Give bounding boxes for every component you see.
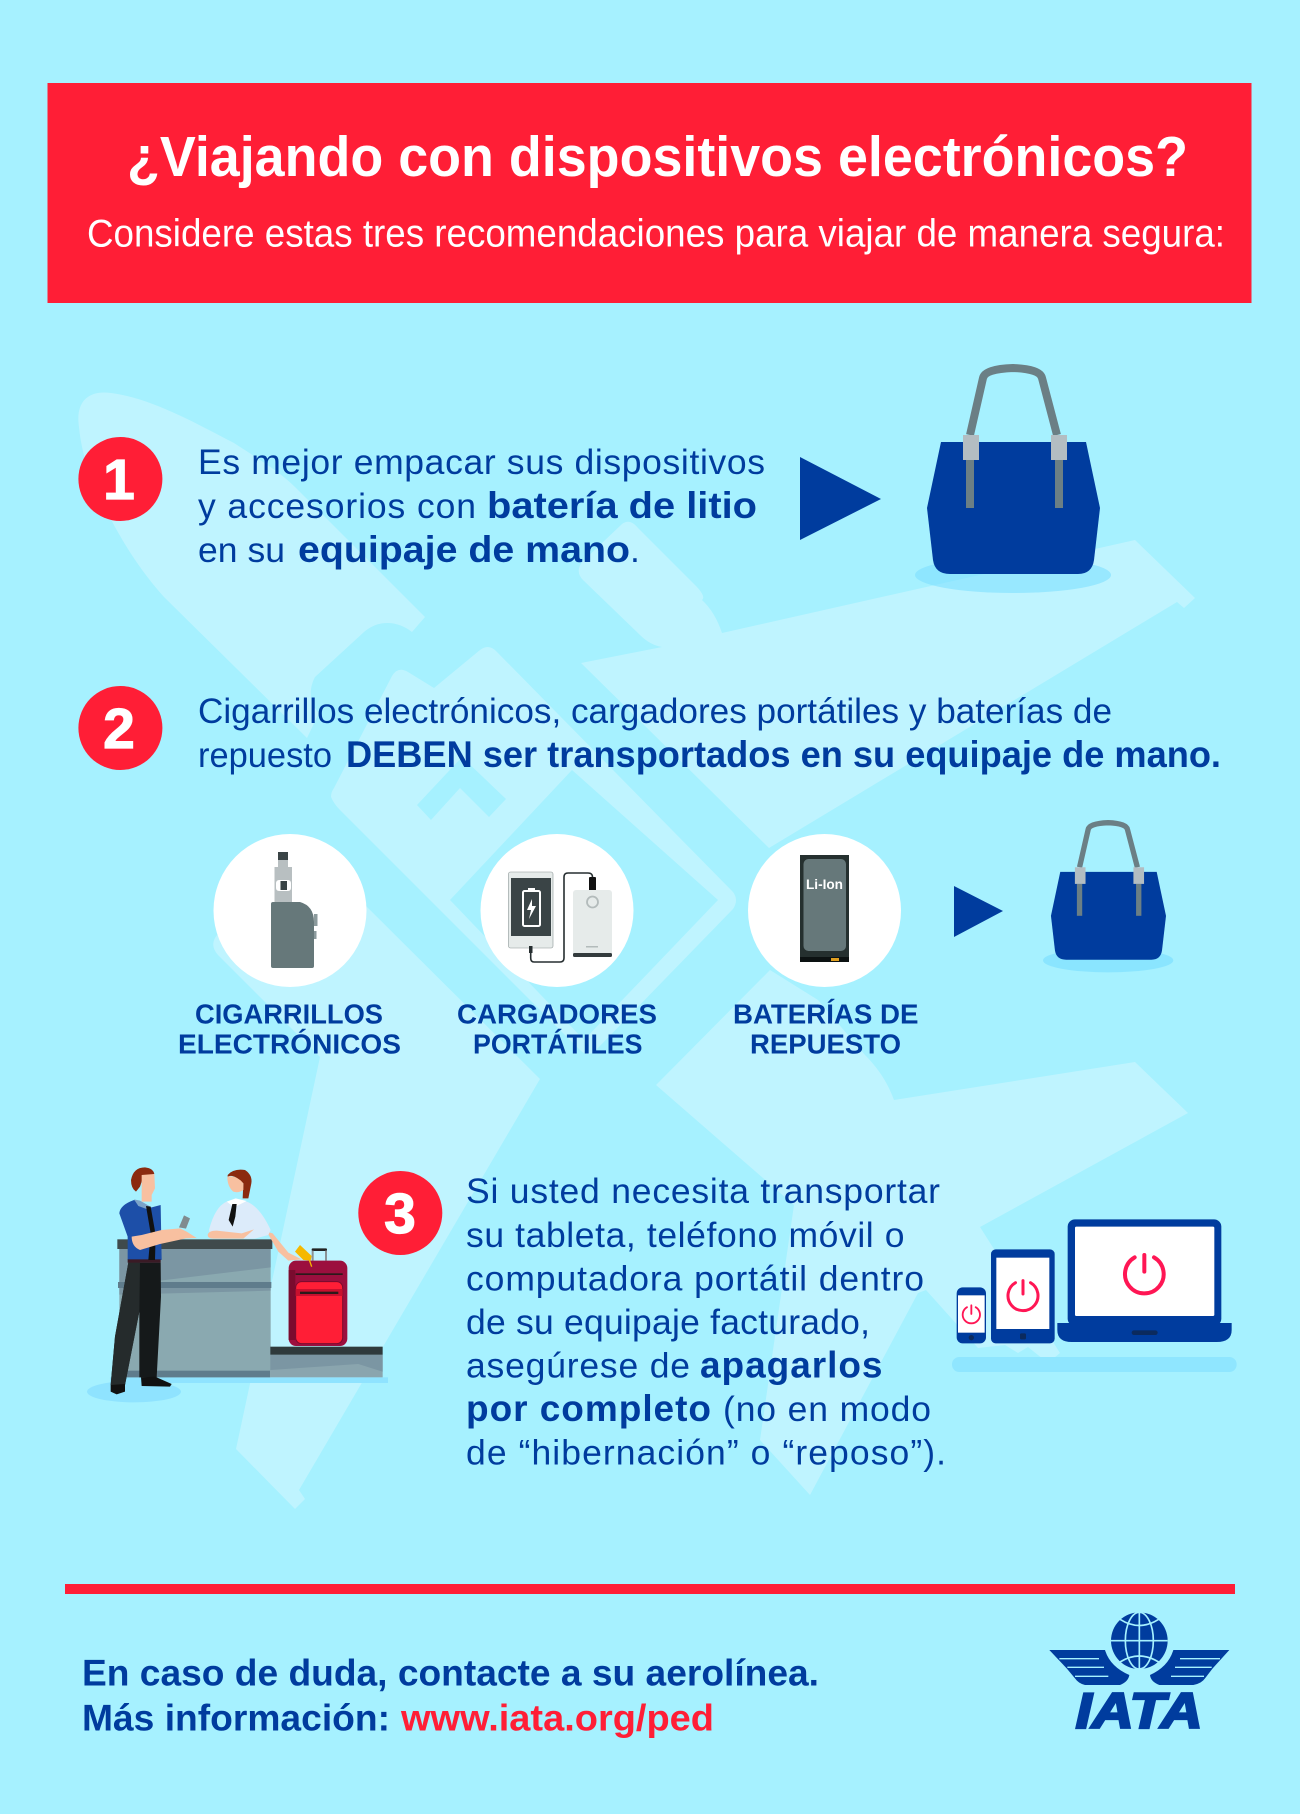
- label: cigarrillos electrónicos: [178, 998, 401, 1060]
- step 3 text: de “hibernación” o “reposo”).: [466, 1432, 946, 1472]
- icon: laptop: [1057, 1219, 1232, 1342]
- step 1 number badge: 1: [103, 448, 135, 512]
- icon: vape: [271, 852, 318, 968]
- label: cargadores portátiles: CARGADORES: [457, 998, 657, 1030]
- icon: lithium-ion battery: [800, 855, 849, 962]
- step 2 text: repuesto: [198, 735, 332, 775]
- agent: [208, 1170, 302, 1261]
- step 3 text: (no en modo: [723, 1389, 931, 1429]
- footer contact text: En caso de duda, contacte a su aerolínea.: [82, 1652, 819, 1694]
- step 1 text: batería de litio: [487, 485, 757, 526]
- wings: [1049, 1650, 1229, 1685]
- step 1 text: y accesorios con: [198, 486, 476, 526]
- step 1 text: .: [630, 530, 640, 570]
- step 2 text: [198, 691, 1221, 775]
- footer contact text: Más información:: [82, 1698, 390, 1738]
- step 3 text: computadora portátil dentro: [466, 1258, 924, 1298]
- header banner: [48, 83, 1252, 303]
- label: cigarrillos electrónicos: ELECTRÓNICOS: [178, 1028, 401, 1060]
- suitcase: [289, 1245, 347, 1346]
- step 3 text: asegúrese de: [466, 1346, 690, 1386]
- step 1 text: [198, 442, 765, 570]
- IATA logo: [1049, 1612, 1229, 1739]
- footer red rule: [65, 1584, 1235, 1594]
- step 3 text: Si usted necesita transportar: [466, 1171, 940, 1211]
- step 1 text: equipaje de mano: [298, 529, 630, 570]
- icon: small carry-on bag: [1043, 823, 1173, 972]
- title: ¿Viajando con dispositivos electrónicos?: [127, 125, 1188, 189]
- panel: e-cigarettes: [178, 834, 401, 1060]
- illustration: devices powered off: [952, 1219, 1237, 1372]
- step 3 text: [466, 1171, 946, 1472]
- passenger: [111, 1167, 197, 1394]
- footer contact text: www.iata.org/ped: [400, 1698, 714, 1738]
- label: baterías de repuesto: BATERÍAS DE: [733, 998, 918, 1030]
- step 2 text: Cigarrillos electrónicos, cargadores portátiles y baterías de: [198, 691, 1112, 731]
- icon: tablet: [991, 1249, 1055, 1343]
- step 2 text: DEBEN ser transportados en su equipaje de mano.: [346, 734, 1221, 775]
- wordmark: IATA: [1076, 1683, 1203, 1739]
- icon: carry-on bag: [915, 368, 1111, 593]
- step 3 text: por completo: [466, 1388, 711, 1429]
- panel: spare batteries: [733, 834, 918, 1060]
- label: baterías de repuesto: REPUESTO: [750, 1028, 901, 1060]
- step 1 text: Es mejor empacar sus dispositivos: [198, 442, 765, 482]
- globe: [1111, 1612, 1168, 1669]
- arrow to carry-on bag: [800, 457, 881, 540]
- subtitle: Considere estas tres recomendaciones para viajar de manera segura:: [87, 212, 1225, 256]
- step 2 number badge: 2: [103, 697, 135, 761]
- panel: power banks: [457, 834, 657, 1060]
- label: baterías de repuesto: [733, 998, 918, 1060]
- step 3 number badge: 3: [384, 1182, 416, 1246]
- step 2 number badge: [78, 686, 162, 770]
- background airplane watermark: [78, 392, 1195, 1509]
- icon: lithium-ion battery: Li-Ion: [806, 877, 843, 892]
- label: cargadores portátiles: [457, 998, 657, 1060]
- icon: phone and power bank: [508, 872, 612, 962]
- footer contact text: [82, 1652, 819, 1738]
- label: cargadores portátiles: PORTÁTILES: [473, 1028, 642, 1060]
- icon: phone: [957, 1287, 986, 1343]
- desk: [117, 1239, 383, 1377]
- step 3 text: apagarlos: [700, 1344, 882, 1386]
- step 3 text: su tableta, teléfono móvil o: [466, 1215, 904, 1255]
- illustration: check-in desk: [87, 1167, 388, 1402]
- step 3 number badge: [358, 1171, 442, 1255]
- step 1 number badge: [78, 437, 162, 521]
- arrow to small bag: [954, 886, 1003, 937]
- step 3 text: de su equipaje facturado,: [466, 1302, 870, 1342]
- label: cigarrillos electrónicos: CIGARRILLOS: [195, 998, 383, 1030]
- step 1 text: en su: [198, 530, 285, 570]
